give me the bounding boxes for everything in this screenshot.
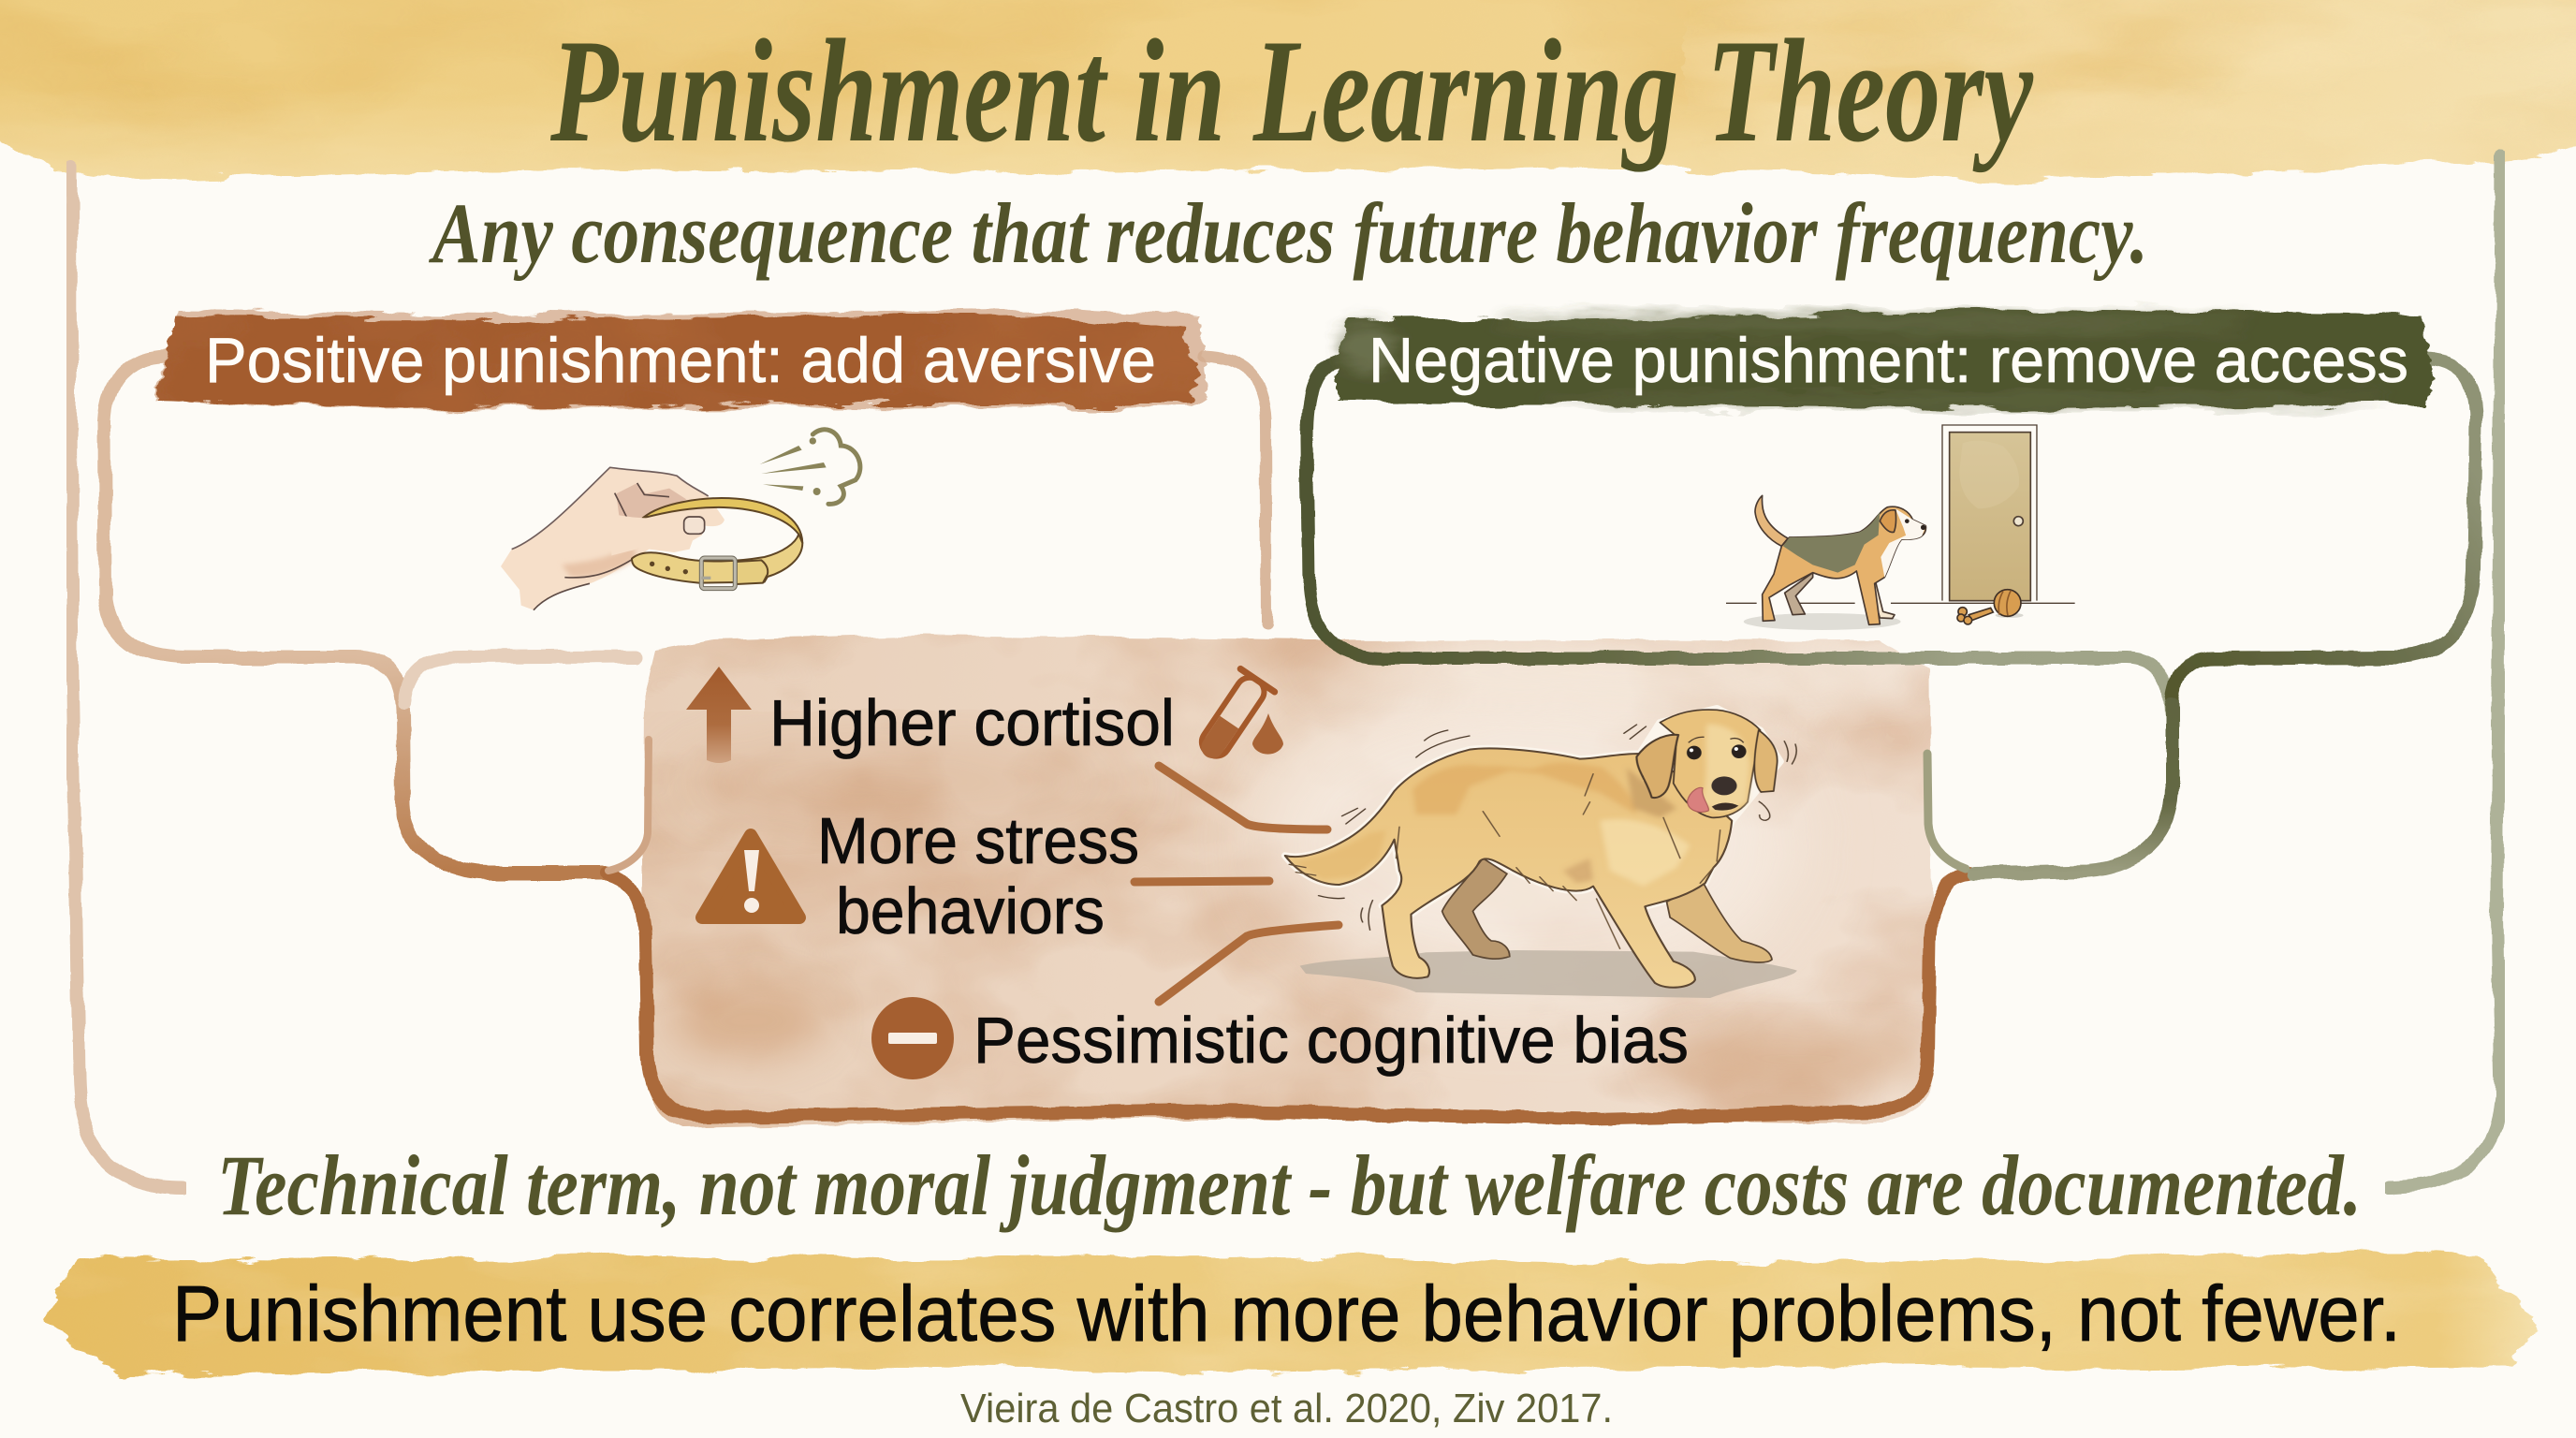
far front leg [1667, 883, 1772, 962]
band text: Punishment use correlates with more behavior problems, not fewer. [172, 1269, 2401, 1357]
line: pill left to split [105, 356, 607, 873]
box border [607, 873, 1969, 1119]
icon: air puff [760, 430, 860, 504]
subtitle: Any consequence that reduces future behavior frequency. [429, 185, 2148, 281]
label: more stress behaviors: behaviors [836, 874, 1105, 947]
line: pill right to junction [2173, 359, 2476, 707]
icon: door [1942, 425, 2037, 601]
band wash [37, 1245, 2546, 1381]
pill wash [150, 309, 1208, 412]
icon: beagle dog [1755, 495, 1925, 624]
pill label: Negative punishment: remove access [1368, 325, 2408, 396]
line: pill left across box top [1307, 359, 2172, 712]
dog head [1636, 710, 1778, 817]
icon: thumb [610, 513, 704, 555]
watercolor wash [637, 627, 1947, 1133]
label: higher cortisol: Higher cortisol [769, 686, 1175, 759]
label: more stress behaviors: More stress [817, 804, 1139, 877]
right outer connector [2389, 157, 2501, 1187]
connector lines to dog [1134, 766, 1339, 1002]
fur strokes [1289, 774, 1720, 948]
illustration: stressed golden retriever [1285, 709, 1797, 998]
panel: takeaway band [37, 1245, 2546, 1381]
floor shadow [1744, 613, 1901, 630]
icon: hand [501, 467, 724, 610]
panel: outcomes box [607, 627, 1969, 1133]
floor line [1726, 601, 2075, 605]
pill label: Positive punishment: add aversive [205, 325, 1156, 396]
label: more stress behaviors [817, 804, 1139, 947]
header watercolor band [0, 0, 2576, 197]
pill: negative punishment [1337, 309, 2432, 408]
connector: negative punishment loop [1307, 359, 2476, 873]
line: pale upper branch [403, 656, 635, 704]
title: Punishment in Learning Theory [549, 9, 2034, 173]
pale halo [1285, 709, 1780, 915]
far hind leg [1442, 858, 1510, 959]
line: stress behaviors [1134, 881, 1269, 882]
icon: thumbnail [684, 517, 705, 534]
line: junction down to box [1975, 702, 2173, 873]
motion and sweat marks [1319, 725, 1796, 930]
icon: test tube and drop [1189, 668, 1283, 768]
illustration: beagle at closed door [1726, 425, 2075, 630]
right brace tick [1927, 754, 1966, 869]
connector: positive punishment loop [105, 356, 1266, 873]
citation: Vieira de Castro et al. 2020, Ziv 2017. [960, 1386, 1613, 1431]
dog body [1285, 748, 1732, 988]
line: cognitive bias [1159, 925, 1339, 1002]
line: cortisol [1159, 766, 1327, 829]
pill: positive punishment [150, 309, 1208, 412]
illustration: hand holding collar with puff [501, 430, 860, 610]
icon: buckle [650, 558, 735, 589]
dog shadow [1300, 950, 1797, 998]
icon: ball and toy [1957, 590, 2024, 624]
icon: collar [632, 498, 802, 584]
line: pill right drop [1203, 357, 1266, 625]
icon: minus circle [871, 997, 954, 1079]
label: pessimistic cognitive bias: Pessimistic cognitive bias [973, 1004, 1689, 1077]
icon: warning triangle [702, 835, 799, 917]
icon: up arrow [686, 667, 752, 763]
coat shading [1293, 763, 1690, 887]
pill wash [1337, 309, 2432, 408]
left outer connector [70, 167, 183, 1187]
left brace tick [608, 740, 649, 871]
